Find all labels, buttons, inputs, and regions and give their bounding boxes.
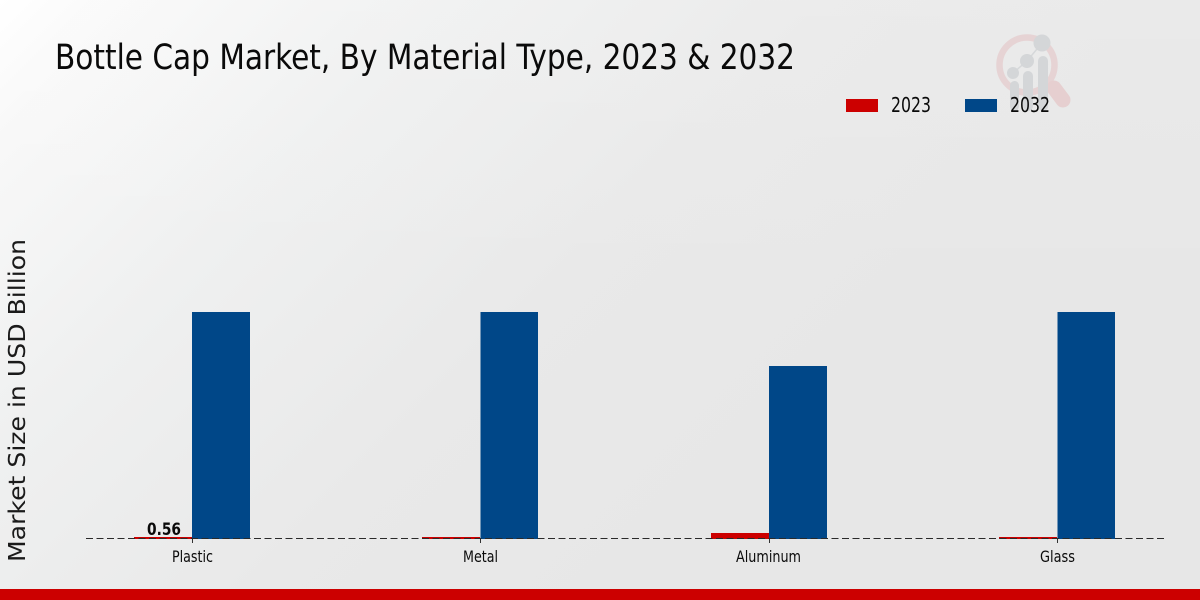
icon: watermark logo <box>1000 34 1063 111</box>
x axis baseline <box>86 538 1164 540</box>
bar chart <box>86 312 1164 566</box>
x axis labels: Metal <box>463 547 498 566</box>
legend <box>846 93 1050 117</box>
bars: Plastic <box>134 312 250 539</box>
x axis labels <box>172 547 1075 566</box>
bars: Metal <box>422 312 538 539</box>
legend: 2032: 2032 <box>1010 93 1050 117</box>
legend: 2023: 2023 <box>891 93 931 117</box>
x axis labels: Plastic <box>172 547 213 566</box>
y axis label: Market Size in USD Billion <box>3 239 31 562</box>
x axis labels: Aluminum <box>736 547 801 566</box>
title: Bottle Cap Market, By Material Type, 2023 & 2032 <box>55 38 795 78</box>
footer bar <box>0 589 1200 600</box>
x axis labels: Glass <box>1040 547 1075 566</box>
legend: 2032 <box>965 93 1050 117</box>
bars: Aluminum <box>711 366 827 539</box>
legend: 2023 <box>846 93 931 117</box>
bars: Glass <box>999 312 1115 539</box>
data label: 0.56 <box>147 520 181 539</box>
